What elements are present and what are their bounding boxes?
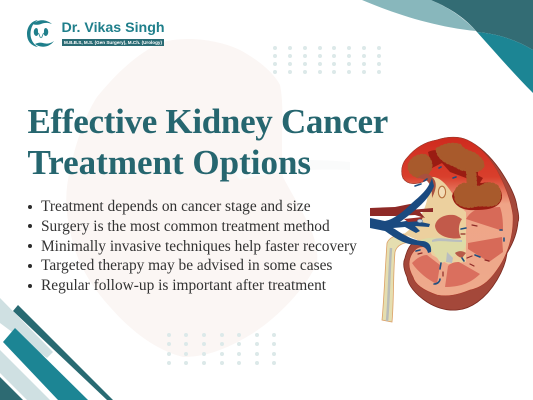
renal sinus: [404, 177, 466, 264]
top right curved shapes: [362, 0, 533, 93]
dark red tumour bed: [428, 150, 502, 210]
vessel ring: [417, 219, 423, 223]
bullet list: Minimally invasive techniques help faster recovery: [41, 238, 357, 255]
renal artery: [370, 203, 433, 218]
tumour masses: [409, 144, 500, 207]
title: [28, 102, 388, 182]
blue vessel dashes: [415, 167, 504, 284]
renal vein: [370, 178, 434, 253]
ureter: [382, 234, 414, 322]
bottom dot grid: [167, 333, 276, 365]
logo name: Dr. Vikas Singh: [62, 20, 165, 36]
bullet list: Surgery is the most common treatment method: [41, 218, 330, 235]
kidney illustration: [370, 137, 519, 322]
pyramid: lower middle: [445, 262, 480, 287]
calyx ring: [438, 186, 446, 198]
background kidney watermark: [66, 39, 350, 357]
top dot grid: [273, 46, 381, 74]
small artery branch: [404, 217, 423, 222]
kidney parenchyma: [402, 137, 513, 296]
pyramid: middle right: [468, 237, 503, 262]
hilum sheath: [417, 174, 436, 198]
ureter centre stripe: [387, 248, 391, 321]
pyramid: upper right: [466, 207, 503, 231]
title: Treatment Options: [28, 143, 311, 182]
small papilla: [455, 251, 466, 258]
bullet list: Targeted therapy may be advised in some cases: [41, 257, 332, 274]
logo emblem: [27, 20, 54, 47]
pale green collecting area: [420, 238, 466, 263]
bullet list: [28, 198, 357, 294]
bottom left diagonal stripes: [0, 298, 113, 400]
bullet list: Regular follow-up is important after treatment: [41, 277, 326, 294]
title: Effective Kidney Cancer: [28, 102, 388, 141]
logo credentials strip: [62, 39, 164, 46]
pyramid: lower left: [412, 255, 440, 284]
red vessel dashes: [418, 225, 489, 276]
grey calyx patches: [432, 238, 462, 263]
bullet list: Treatment depends on cancer stage and size: [41, 198, 311, 215]
central medulla: [435, 215, 462, 238]
logo credentials strip: M.B.B.S, M.S. (Gen Surgery), M.Ch. (Urology): [64, 40, 162, 45]
kidney outer capsule: [402, 137, 519, 310]
